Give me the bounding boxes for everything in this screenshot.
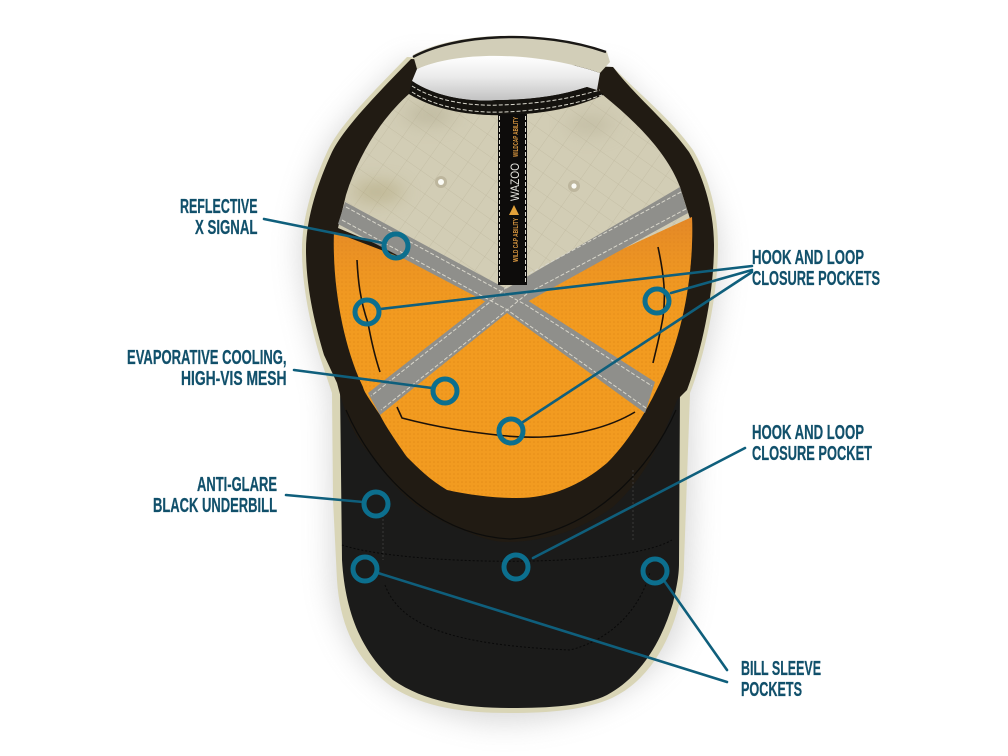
cream outer edge (302, 57, 718, 713)
label: hook and loop closure pockets: CLOSURE POCKETS (752, 268, 880, 290)
label: anti-glare underbill: ANTI-GLARE (197, 474, 277, 496)
cap photo (300, 36, 720, 722)
label: bill sleeve pockets (741, 658, 821, 701)
label: anti-glare underbill: BLACK UNDERBILL (153, 495, 277, 517)
cap drop shadow (300, 62, 720, 722)
centre label tape: WAZOO (508, 163, 522, 201)
collar tape (409, 81, 604, 115)
orange shading (334, 217, 692, 393)
marker rings (353, 234, 669, 583)
label: bill sleeve pockets: BILL SLEEVE (741, 658, 821, 680)
adjustment strap (413, 36, 610, 73)
lining shading (352, 106, 614, 201)
beige crown lining (338, 93, 692, 300)
bill stitching (342, 470, 672, 650)
label: anti-glare underbill (153, 474, 277, 517)
label: evaporative cooling mesh (127, 347, 286, 390)
vent eyelets (435, 176, 580, 192)
label: reflective x signal: REFLECTIVE (180, 196, 258, 218)
label: evaporative cooling mesh: HIGH-VIS MESH (181, 368, 286, 390)
strap black edge (413, 37, 606, 57)
black inner band (306, 59, 714, 542)
label: bill sleeve pockets: POCKETS (741, 679, 802, 701)
centre label tape: WILDCAP ABILITY (513, 117, 520, 157)
orange mesh lining (334, 217, 692, 498)
leader lines (264, 219, 752, 682)
pocket slits (357, 247, 664, 437)
bill black underside (340, 385, 680, 708)
reflective x signal bands (338, 187, 688, 415)
centre label tape: WILD CAP ABILITY (513, 218, 520, 262)
label: hook and loop closure pockets (752, 247, 880, 290)
label: hook and loop closure pocket: HOOK AND LOOP (752, 422, 864, 444)
band stitching (346, 410, 676, 539)
label: reflective x signal (180, 196, 258, 239)
centre label tape (498, 114, 527, 285)
label: evaporative cooling mesh: EVAPORATIVE COOLING, (127, 347, 286, 369)
label: reflective x signal: X SIGNAL (195, 217, 258, 239)
strap opening (412, 56, 600, 101)
label: hook and loop closure pocket: CLOSURE POCKET (752, 443, 872, 465)
label: hook and loop closure pockets: HOOK AND LOOP (752, 247, 864, 269)
label: hook and loop closure pocket (752, 422, 872, 465)
